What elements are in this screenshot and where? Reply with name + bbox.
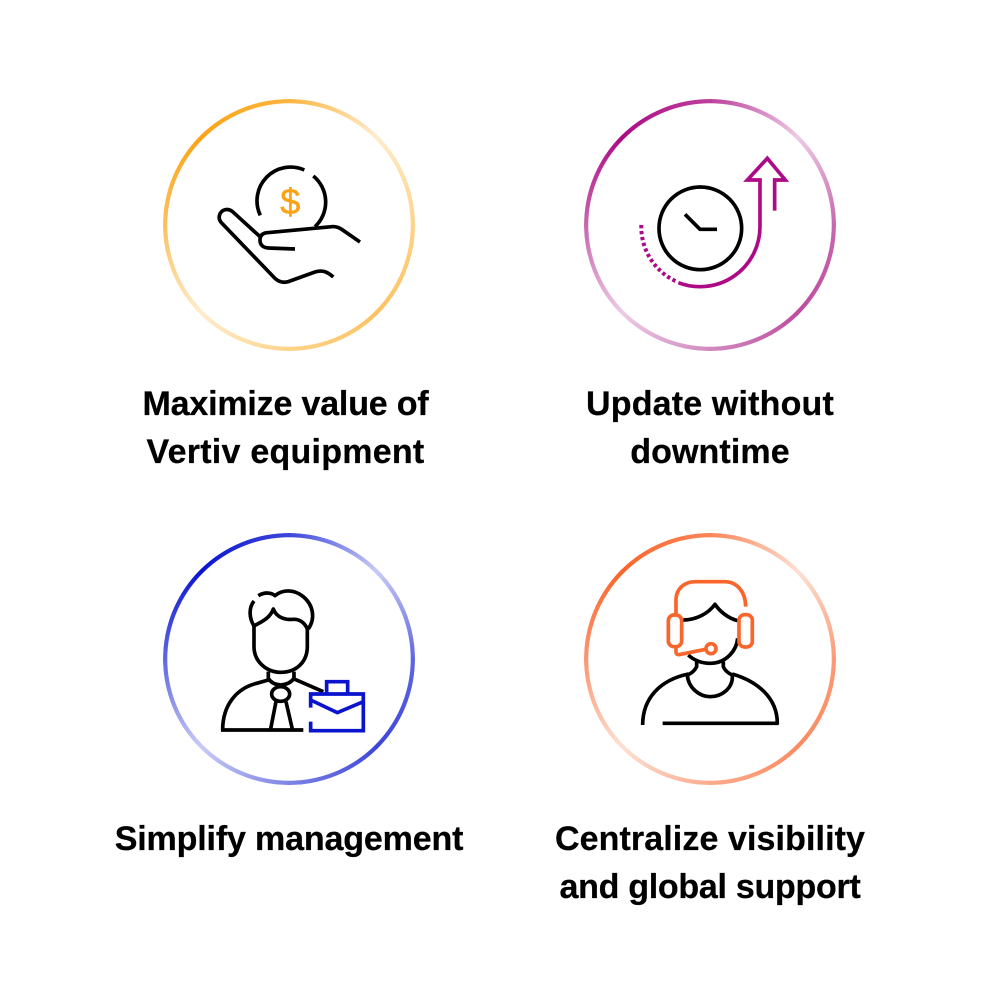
icon: hand holding coin: $ — [280, 181, 300, 222]
heading: Update without downtime — [586, 385, 834, 471]
heading: Centralize visibility and global support: Centralize visibility — [555, 820, 865, 858]
icon: hand holding coin — [219, 167, 360, 282]
ring: magenta circle — [584, 99, 836, 351]
heading: Centralize visibility and global support — [555, 820, 865, 906]
icon: support agent with headset — [643, 582, 777, 725]
heading: Update without downtime: downtime — [630, 433, 790, 471]
ring: orange circle — [163, 99, 415, 351]
icon: clock with upward arrow — [641, 158, 785, 287]
ring: coral circle — [584, 533, 836, 785]
heading: Maximize value of Vertiv equipment: Maximize value of — [142, 385, 429, 423]
heading: Simplify management: Simplify management — [115, 820, 463, 858]
heading: Centralize visibility and global support: and global support — [559, 868, 861, 906]
icon: businessman with briefcase — [221, 591, 363, 731]
heading: Maximize value of Vertiv equipment: Vertiv equipment — [147, 433, 424, 471]
heading: Maximize value of Vertiv equipment — [142, 385, 429, 471]
ring: blue circle — [163, 533, 415, 785]
heading: Update without downtime: Update without — [586, 385, 834, 423]
